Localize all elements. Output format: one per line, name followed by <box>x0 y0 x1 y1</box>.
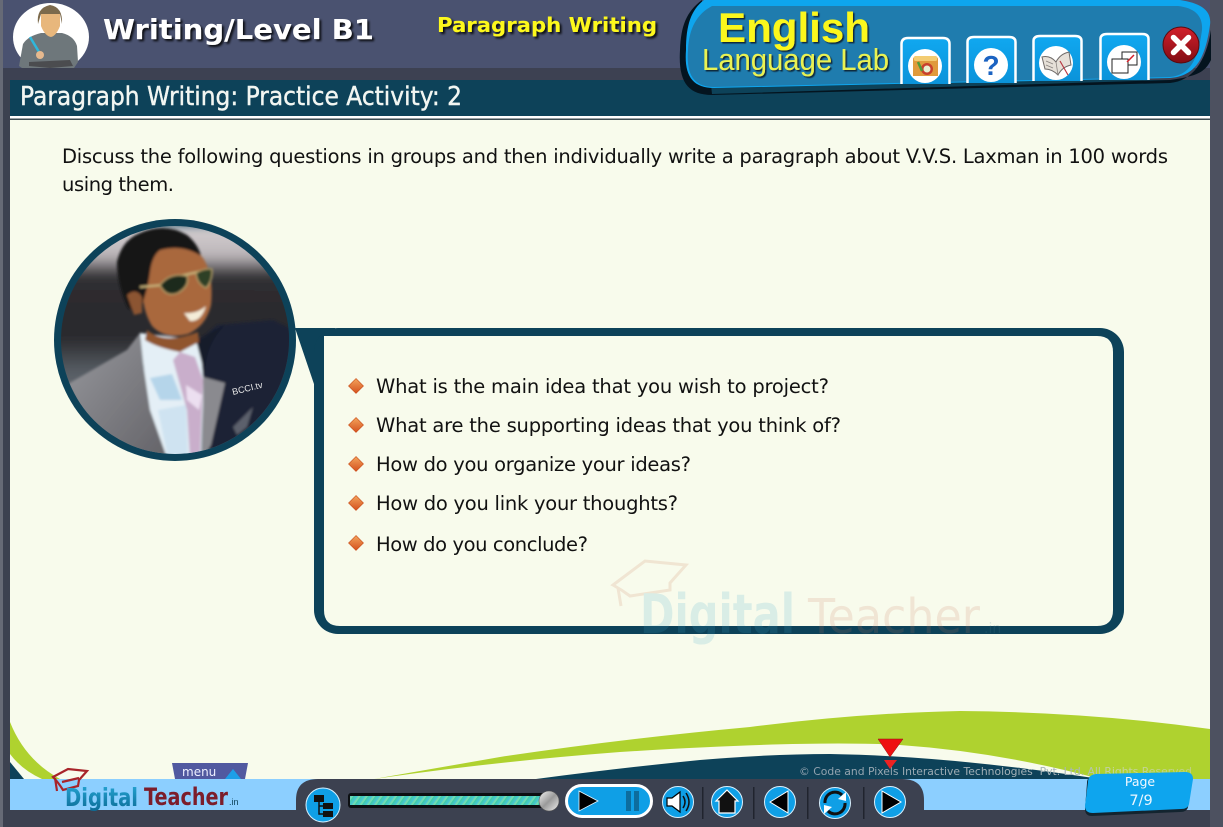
green left curve <box>10 722 60 779</box>
next button <box>874 786 906 818</box>
header band <box>3 0 1210 68</box>
question 5: How do you conclude? <box>376 533 588 556</box>
avatar face <box>41 14 60 37</box>
portrait ring <box>54 219 296 461</box>
instruction text <box>62 145 1168 196</box>
green right band <box>374 711 1210 779</box>
progress fill <box>350 796 546 805</box>
footer base <box>3 810 1210 827</box>
tab: help <box>968 37 1016 83</box>
marker large triangle <box>878 739 903 757</box>
logo word Digital: Digital <box>65 783 138 812</box>
menu tab <box>172 763 248 779</box>
topic title: Paragraph Writing: Paragraph Writing <box>437 13 657 37</box>
marker small triangle <box>884 760 897 769</box>
page label: Page <box>1125 774 1155 789</box>
close button <box>1163 27 1199 63</box>
header lower strip <box>3 68 1210 80</box>
question 3: How do you organize your ideas? <box>376 453 691 476</box>
heading underline <box>10 116 1210 119</box>
teal corner <box>10 762 24 779</box>
avatar pen <box>29 36 40 52</box>
separator <box>863 787 864 819</box>
logo suffix: .in <box>229 797 239 807</box>
badge face <box>1085 772 1193 813</box>
separator <box>702 787 704 819</box>
control bar shape <box>296 779 924 827</box>
panel shadow <box>680 0 1211 95</box>
content background <box>10 116 1210 779</box>
teal hill <box>536 754 1100 779</box>
instruction line 2: using them. <box>62 173 174 196</box>
watermark cap <box>613 561 686 606</box>
logo word Teacher: Teacher <box>144 783 228 811</box>
question 1: What is the main idea that you wish to project? <box>376 375 829 398</box>
play and pause button <box>566 786 652 816</box>
page indicator <box>1085 772 1193 816</box>
tab: book <box>1034 36 1082 81</box>
position marker <box>878 739 903 769</box>
panel face <box>688 6 1202 87</box>
avatar desk <box>29 60 73 68</box>
separator <box>807 787 808 819</box>
media control bar <box>296 779 924 827</box>
portrait: V.V.S. Laxman <box>50 219 300 461</box>
jacket badge: BCCI.tv <box>231 380 264 397</box>
page number: 7/9 <box>1129 793 1153 809</box>
question 2: What are the supporting ideas that you think of? <box>376 414 841 437</box>
avatar hand <box>36 51 44 59</box>
branding panel: English Language Lab <box>680 0 1211 95</box>
home button <box>712 786 742 818</box>
activity heading bar <box>10 80 1210 116</box>
footer band <box>10 779 1210 810</box>
previous button <box>764 786 796 818</box>
tab: help: ? <box>982 50 1000 81</box>
section title: Writing/Level B1: Writing/Level B1 <box>103 13 374 46</box>
watermark: Digital Teacher <box>613 561 1001 646</box>
portrait photo <box>61 226 289 454</box>
sound button <box>662 786 694 818</box>
progress track <box>348 793 552 808</box>
avatar hair <box>38 5 62 24</box>
progress knob <box>539 791 559 811</box>
watermark word Digital: Digital <box>640 583 795 646</box>
left frame edge <box>0 0 3 827</box>
brand words Language Lab: Language Lab <box>702 42 889 77</box>
separator <box>753 787 754 819</box>
logo: Digital Teacher <box>53 769 239 812</box>
panel rim <box>686 0 1210 88</box>
tree menu button <box>306 788 340 822</box>
menu label: menu <box>182 765 216 779</box>
refresh button <box>820 788 850 818</box>
avatar body <box>19 33 78 68</box>
watermark word Teacher: Teacher <box>807 589 980 645</box>
question 4: How do you link your thoughts? <box>376 492 678 515</box>
tab: schedule folder <box>902 38 950 84</box>
landscape swoosh <box>10 711 1210 779</box>
avatar: student writing <box>13 3 89 71</box>
menu arrow <box>225 769 241 779</box>
bubble interior <box>324 336 1113 626</box>
speech bubble with questions <box>295 328 1124 634</box>
bubble tail <box>295 328 335 400</box>
instruction line 1: Discuss the following questions in groups and then individually write a paragraph about V.V.S. Laxman in 100 words <box>62 145 1168 168</box>
menu tab shape <box>172 763 248 779</box>
activity heading: Paragraph Writing: Practice Activity: 2 <box>20 82 462 112</box>
brand word English: English <box>718 4 870 51</box>
right frame edge <box>1210 0 1223 827</box>
watermark suffix: .in <box>984 621 1001 637</box>
bubble frame <box>314 328 1124 634</box>
avatar background <box>13 3 89 61</box>
copyright note: © Code and Pixels Interactive Technologies Pvt. Ltd. All Rights Reserved <box>799 766 1192 778</box>
logo cap <box>53 769 87 791</box>
badge shadow <box>1085 773 1192 816</box>
tab: windows <box>1100 34 1148 80</box>
